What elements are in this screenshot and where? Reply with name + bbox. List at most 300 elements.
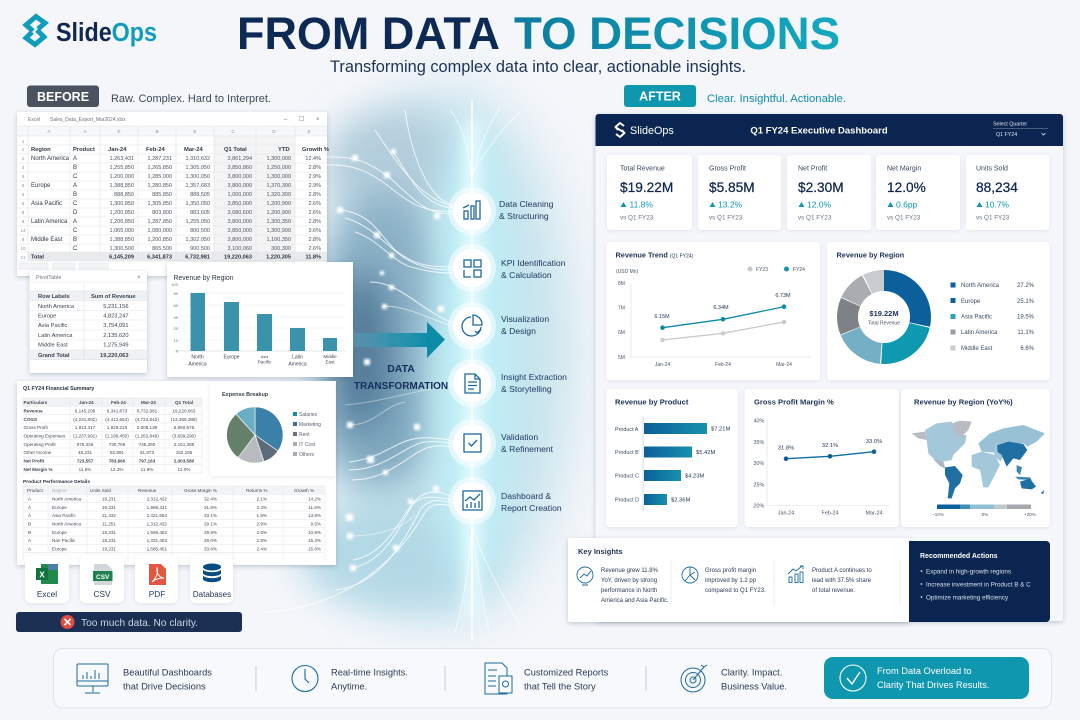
panel: financial summary and product tables: A	[28, 538, 32, 543]
panel: excel spreadsheet window: 11	[21, 255, 26, 260]
after label: AFTER	[639, 90, 681, 104]
panel: revenue by region bar window: 100	[171, 282, 179, 287]
panel: excel spreadsheet window: 19,220,063	[224, 254, 252, 260]
icon: databases: Databases	[193, 590, 231, 599]
panel: financial summary and product tables: Nan Pacific	[52, 538, 76, 543]
panel: revenue trend: Mar-24	[776, 362, 792, 368]
panel: excel spreadsheet window: 6,341,873	[147, 254, 172, 260]
panel: financial summary and product tables: Gross Profit	[24, 425, 48, 430]
panel: revenue by region bar window: 80	[174, 291, 179, 296]
panel: financial summary and product tables: 2,008,139	[137, 425, 158, 430]
panel: excel spreadsheet window: 2.6%	[308, 210, 321, 216]
panel: excel spreadsheet window: Product	[73, 147, 95, 153]
panel: financial summary and product tables: 15.3%	[308, 538, 321, 543]
panel: excel spreadsheet window: 6	[22, 174, 25, 179]
panel: excel spreadsheet window: D	[272, 129, 276, 134]
panel: financial summary and product tables: 15.8%	[308, 546, 321, 552]
panel: excel spreadsheet window: 1,300,000	[267, 156, 291, 162]
panel: revenue trend: 6.73M	[775, 293, 791, 299]
panel: financial summary and product tables: Returns %	[246, 488, 267, 493]
panel: expense breakup: IT Cost	[299, 442, 316, 448]
panel: financial summary and product tables: 12.3%	[110, 467, 124, 472]
panel: revenue trend: 6.34M	[713, 305, 729, 311]
arrow: data transformation	[353, 322, 445, 358]
panel: financial summary and product tables: 1,568,452	[147, 530, 167, 535]
kpi: gross profit: 13.2%	[718, 200, 743, 210]
panel: revenue trend: Feb-24	[715, 362, 731, 368]
panel: financial summary and product tables: A	[28, 496, 32, 502]
panel: financial summary and product tables: Net Profit	[24, 458, 45, 464]
panel: revenue trend: 7M	[618, 306, 625, 312]
panel: excel spreadsheet window: B	[155, 129, 159, 134]
panel: financial summary and product tables: 152,195	[176, 450, 193, 455]
panel: excel spreadsheet window: 1,287,231	[148, 156, 172, 162]
benefit: real-time: Anytime.	[331, 682, 367, 692]
panel: financial summary and product tables: Europe	[52, 530, 67, 535]
panel: excel spreadsheet window: 2.6%	[308, 246, 321, 252]
icon: excel: Excel	[37, 589, 57, 599]
insight: product a: of total revenue.	[812, 588, 855, 594]
before label	[27, 86, 271, 107]
icon: pdf: PDF	[149, 589, 165, 599]
panel: revenue by product: Product D	[615, 498, 639, 504]
panel: pivot table window: 4,823,247	[103, 314, 128, 320]
donut legend: 25.1%	[1017, 299, 1035, 305]
panel: financial summary and product tables: Particulars	[24, 400, 48, 405]
panel: gross profit margin: 35%	[754, 440, 764, 446]
panel: excel spreadsheet window: 2.8%	[308, 165, 321, 171]
panel: excel spreadsheet window: Europe	[31, 183, 51, 189]
panel: financial summary and product tables: (1,237,991)	[73, 434, 97, 438]
panel: pivot table window: Row Labels	[38, 294, 70, 300]
panel: excel spreadsheet window: 1,200,900	[267, 201, 291, 207]
panel: financial summary and product tables: 51,873	[140, 450, 154, 455]
panel: excel spreadsheet window: 6,145,209	[109, 254, 134, 260]
panel: financial summary and product tables: 16,231	[102, 505, 116, 510]
panel: financial summary and product tables: 1,929,219	[107, 425, 128, 430]
panel: excel spreadsheet window: 3,850,000	[228, 201, 252, 207]
panel: financial summary and product tables: 745,290	[139, 442, 156, 447]
panel: financial summary and product tables: (4,231,892)	[73, 417, 97, 422]
donut legend: 6.6%	[1020, 346, 1035, 352]
panel: excel spreadsheet window: 1,310,632	[186, 156, 210, 162]
panel: gross profit margin: 25%	[754, 483, 764, 489]
panel: revenue by region bar window: Latin	[292, 354, 303, 360]
logo wordmark: SlideOps	[56, 19, 157, 47]
donut legend: 19.5%	[1017, 314, 1035, 320]
callout: from data overload	[824, 657, 1029, 699]
insight: product a	[788, 566, 872, 594]
after label	[624, 85, 846, 107]
panel: revenue trend: 5M	[618, 355, 625, 361]
panel: financial summary and product tables: 675,326	[77, 442, 94, 447]
panel: financial summary and product tables: 18,231	[102, 496, 116, 502]
panel: financial summary and product tables: 2.9%	[257, 522, 267, 526]
panel: pivot table window: 2,135,620	[103, 333, 128, 339]
callout: from data overload: From Data Overload to	[877, 666, 972, 676]
panel: excel spreadsheet window: 300,300	[271, 246, 291, 252]
panel: excel spreadsheet window: North America	[31, 156, 70, 162]
panel: key insights	[568, 538, 910, 622]
panel: gross profit margin: 30%	[754, 461, 764, 467]
donut legend: North America	[961, 283, 1000, 289]
panel: excel spreadsheet window: E	[193, 129, 197, 134]
panel: recommended actions	[909, 541, 1050, 622]
panel: revenue by region map: Revenue by Region (YoY%)	[914, 398, 1013, 406]
panel: financial summary and product tables: (1,262,849)	[135, 434, 159, 438]
panel: excel spreadsheet window: 3,680,600	[228, 210, 252, 216]
icon: dashboard logo	[616, 123, 624, 137]
panel: financial summary and product tables: (1,198,450)	[105, 434, 129, 438]
panel: excel spreadsheet window: E	[117, 129, 121, 134]
panel: excel spreadsheet window: C	[231, 129, 235, 134]
panel: revenue by region bar window: America	[288, 362, 307, 368]
insight: profit margin: improved by 1.2 pp	[705, 578, 757, 584]
panel: excel spreadsheet window: ×	[316, 117, 320, 123]
panel: gross profit margin: 40%	[754, 419, 764, 425]
icon: error cross	[60, 615, 74, 629]
benefit: clarity: Business Value.	[721, 682, 787, 692]
before label: Raw. Complex. Hard to Interpret.	[111, 93, 271, 105]
step 1: data cleaning: & Structuring	[499, 211, 549, 221]
kpi: units sold: 10.7%	[985, 200, 1010, 210]
panel: excel spreadsheet window: 1,370,300	[267, 183, 291, 189]
panel: gross profit margin	[744, 389, 899, 527]
panel: excel spreadsheet window: 5	[22, 183, 25, 188]
panel: financial summary and product tables: 1,331,453	[147, 538, 167, 543]
panel: financial summary and product tables: 1,913,317	[75, 425, 96, 430]
panel: revenue by product: $2.36M	[671, 498, 691, 504]
donut legend: Asia Pacific	[961, 314, 992, 320]
icon: csv	[80, 555, 124, 603]
panel: excel spreadsheet window: 1,206,850	[110, 219, 134, 225]
panel: financial summary and product tables: A	[28, 505, 32, 510]
title: FROM DATA	[237, 8, 500, 59]
panel: pivot table window: Grand Total	[38, 353, 70, 359]
panel: financial summary and product tables: 1.8%	[257, 513, 267, 518]
chart legend: FY24	[793, 267, 805, 273]
panel: excel spreadsheet window: 803,800	[152, 210, 172, 216]
panel: excel spreadsheet window: 8	[22, 210, 25, 215]
panel: excel spreadsheet window: 1,300,050	[186, 174, 210, 180]
panel: revenue by region donut	[827, 242, 1050, 380]
panel: financial summary and product tables: 48,231	[78, 450, 92, 455]
panel: financial summary and product tables: Europe	[52, 505, 67, 510]
step 4: insight extraction	[453, 364, 567, 402]
panel: revenue by region bar window: Pacific	[258, 360, 272, 364]
panel: revenue by region donut: $19.22M	[869, 309, 899, 318]
icon: pdf	[135, 555, 178, 603]
panel: financial summary and product tables: 28.0%	[204, 538, 217, 543]
panel: revenue by product: $4.23M	[685, 474, 705, 480]
panel: revenue by region bar window: 0	[176, 348, 179, 354]
panel: financial summary and product tables: 1,988,431	[147, 505, 167, 510]
panel: gross profit margin: Feb-24	[821, 510, 839, 516]
panel: pivot table window: Middle East	[38, 342, 68, 348]
line chart: margin	[784, 449, 876, 461]
panel: excel spreadsheet window: 1,100,350	[267, 237, 291, 243]
bar chart: region bars	[190, 293, 337, 351]
label: data transformation	[354, 363, 448, 392]
subtitle: Transforming complex data into clear, actionable insights.	[330, 57, 746, 76]
panel: excel spreadsheet window: 885,850	[152, 192, 172, 198]
panel: financial summary and product tables: 6,145,209	[75, 408, 96, 414]
panel: revenue trend: (USD Mn)	[616, 269, 639, 275]
step 2: kpi identification: & Calculation	[501, 270, 552, 280]
insight: profit margin: Gross profit margin	[705, 568, 756, 574]
kpi: gross profit: Gross Profit	[709, 166, 746, 172]
panel: revenue by product	[606, 389, 738, 527]
panel: financial summary and product tables: 2,421,654	[147, 513, 167, 518]
kpi: net margin: 0.6pp	[896, 200, 918, 210]
panel: excel spreadsheet window: 883,605	[190, 210, 210, 216]
panel: revenue trend: 6M	[618, 330, 625, 336]
panel: financial summary and product tables: 33.1%	[204, 513, 217, 518]
kpi: net margin: 12.0%	[887, 180, 926, 195]
panel: revenue by product: $7.21M	[711, 426, 731, 432]
panel: excel spreadsheet window: 1,388,850	[110, 183, 134, 189]
panel: financial summary and product tables: Q1 Total	[175, 400, 193, 405]
step 5: validation: Validation	[501, 432, 538, 442]
dashboard header: SlideOps	[630, 125, 674, 137]
panel: excel spreadsheet window: 1,200,850	[148, 237, 172, 243]
icon: csv: CSV	[96, 574, 110, 581]
panel: excel spreadsheet window: 2.9%	[308, 174, 321, 180]
panel: excel spreadsheet window	[17, 112, 329, 276]
insight: profit margin: compared to Q1 FY23.	[705, 588, 766, 594]
panel: financial summary and product tables: 12.0%	[177, 467, 191, 472]
panel: revenue trend	[606, 242, 820, 380]
panel: financial summary and product tables: 783,660	[109, 458, 126, 464]
panel: expense breakup: Rent	[299, 432, 310, 438]
panel: excel spreadsheet window: 1,280,850	[148, 183, 172, 189]
panel: financial summary and product tables: 18,231	[102, 538, 116, 543]
panel: gross profit margin: 20%	[754, 504, 764, 510]
panel: financial summary and product tables: 29.8%	[204, 530, 217, 535]
panel: excel spreadsheet window: 1,302,050	[186, 237, 210, 243]
world map	[912, 421, 1045, 498]
donut legend	[950, 282, 1035, 352]
callout: from data overload: Clarity That Drives Results.	[877, 680, 989, 690]
panel: financial summary and product tables: 11.8%	[79, 467, 91, 472]
panel: revenue by region bar window: East	[325, 360, 335, 364]
map legend: +20%	[1024, 512, 1036, 517]
panel: financial summary and product tables: 9.5%	[311, 522, 321, 526]
panel: excel spreadsheet window: 14	[20, 228, 26, 233]
icon: databases	[190, 555, 233, 603]
donut legend: 27.2%	[1017, 283, 1035, 289]
panel: gross profit margin: 31.8%	[778, 446, 794, 452]
panel: financial summary and product tables: Revenue	[138, 488, 157, 493]
panel: financial summary and product tables: 723,557	[77, 458, 94, 464]
panel: pivot table window	[30, 271, 147, 373]
panel: excel spreadsheet window: 1,220,305	[266, 254, 291, 260]
panel: revenue trend: Revenue Trend (Q1 FY24)	[616, 250, 694, 260]
panel: excel spreadsheet window: 6,732,981	[185, 254, 210, 260]
icon: excel: X	[39, 570, 45, 580]
logo	[26, 16, 157, 47]
callout: too much data: Too much data. No clarity.	[81, 618, 198, 629]
panel: financial summary and product tables: 2,312,432	[147, 496, 167, 502]
panel: excel spreadsheet window: Growth %	[302, 147, 329, 153]
step 3: visualization: Visualization	[501, 314, 549, 324]
panel: expense breakup: Marketing	[299, 422, 321, 428]
panel: revenue by region donut: Total Revenue	[868, 320, 900, 326]
insight: revenue growth: Revenue grew 11.8%	[601, 568, 659, 574]
panel: excel spreadsheet window: 2.8%	[308, 219, 321, 225]
kpi: total revenue: $19.22M	[620, 180, 673, 195]
panel: financial summary and product tables: 2,303,580	[174, 458, 195, 464]
benefit: clarity	[681, 665, 787, 692]
panel: financial summary and product tables: (4,412,654)	[105, 417, 129, 422]
after label: Clear. Insightful. Actionable.	[707, 93, 846, 105]
panel: pivot table window: 3,754,091	[103, 323, 128, 329]
step 6: dashboard: Dashboard &	[501, 491, 551, 501]
panel: financial summary and product tables: B	[28, 530, 31, 535]
panel: excel spreadsheet window: Feb-24	[146, 147, 165, 153]
panel: excel spreadsheet window: Q1 Total	[224, 147, 247, 153]
panel: financial summary and product tables: 797,163	[139, 458, 156, 464]
line chart: fy24	[660, 304, 786, 330]
panel: financial summary and product tables: 19,231	[102, 546, 116, 552]
bar chart: products	[644, 423, 707, 505]
panel: pivot table window: North America	[38, 304, 75, 310]
kpi: units sold: Units Sold	[976, 166, 1008, 172]
panel: financial summary and product tables: Asia Pacific	[52, 513, 76, 518]
panel: excel spreadsheet window: 3,100,060	[228, 246, 252, 252]
panel: excel spreadsheet window: Asia Pacific	[31, 201, 62, 207]
panel: financial summary and product tables: 19,220,063	[172, 408, 196, 414]
panel: revenue by region map	[901, 389, 1050, 527]
dashboard header: Q1 FY24 Executive Dashboard	[750, 126, 888, 136]
panel: excel spreadsheet window: 888,850	[114, 192, 134, 198]
kpi: total revenue: vs Q1 FY23	[620, 214, 654, 222]
panel: excel spreadsheet window: 3,861,294	[228, 156, 252, 162]
panel: excel spreadsheet window: B	[73, 165, 77, 171]
panel: excel spreadsheet window: 3	[22, 165, 25, 170]
panel: revenue by region bar window: Asia	[261, 355, 269, 359]
panel: excel spreadsheet window: Jan-24	[108, 147, 127, 153]
panel: financial summary and product tables: 13.8%	[308, 513, 321, 518]
chart legend	[748, 266, 805, 273]
panel: pivot table window: ×	[137, 275, 141, 281]
panel: financial summary and product tables: B	[28, 522, 31, 526]
panel: excel spreadsheet window: 1,388,850	[110, 237, 134, 243]
panel: financial summary and product tables: 15,231	[102, 530, 116, 535]
kpi: gross profit	[698, 155, 781, 230]
panel: financial summary and product tables: Net Margin %	[24, 467, 53, 472]
panel: excel spreadsheet window: 865,500	[152, 246, 172, 252]
line chart: fy23	[660, 320, 786, 342]
panel: excel spreadsheet window: 1,357,683	[186, 183, 210, 189]
panel: financial summary and product tables: 1,685,451	[147, 546, 167, 552]
panel: revenue by region bar window: Europe	[223, 354, 240, 360]
panel: financial summary and product tables: 11.6%	[308, 505, 321, 510]
panel: excel spreadsheet window: 1,065,000	[110, 228, 134, 234]
panel: financial summary and product tables: Product Performance Details	[23, 479, 90, 485]
panel: recommended actions: Recommended Actions	[920, 553, 998, 560]
benefit: dashboards: Beautiful Dashboards	[123, 668, 212, 678]
panel: pivot table window: Sum of Revenue	[91, 294, 136, 300]
kpi: units sold: 88,234	[976, 180, 1018, 195]
panel: financial summary and product tables: 10.8%	[308, 530, 321, 535]
panel: revenue by region bar window: 60	[174, 303, 179, 308]
icon: check circle	[840, 665, 866, 691]
panel: financial summary and product tables: (3,699,290)	[172, 434, 196, 438]
panel: excel spreadsheet window: 1,350,050	[186, 201, 210, 207]
map legend: 0%	[982, 512, 988, 517]
panel: financial summary and product tables: Product	[27, 488, 44, 493]
kpi: net profit: Net Profit	[798, 166, 827, 172]
panel: excel spreadsheet window: 1,287,850	[148, 219, 172, 225]
panel: excel spreadsheet window: 6	[22, 201, 25, 206]
panel: revenue by product: Product A	[615, 427, 639, 433]
kpi: total revenue: Total Revenue	[620, 166, 665, 172]
panel: excel spreadsheet window: 900,500	[190, 246, 210, 252]
map legend: −10%	[932, 512, 944, 517]
dashboard header: Select Quarter	[993, 122, 1027, 128]
icon: excel	[25, 555, 69, 603]
panel: financial summary and product tables: 2.8%	[257, 538, 267, 543]
panel: excel spreadsheet window: 888,505	[190, 192, 210, 198]
panel: excel spreadsheet window: C	[73, 174, 78, 180]
panel: excel spreadsheet window: 1,255,050	[186, 219, 210, 225]
panel: excel spreadsheet window: 1	[22, 147, 25, 152]
panel: excel spreadsheet window: 1,300,000	[267, 174, 291, 180]
panel: financial summary and product tables: Other Income	[24, 450, 52, 455]
panel: excel spreadsheet window: 10	[20, 246, 26, 251]
panel: excel spreadsheet window: 1,200,900	[267, 210, 291, 216]
insight: revenue growth: performance in North	[601, 588, 657, 594]
kpi: units sold: vs Q1 FY23	[976, 214, 1010, 222]
panel: excel spreadsheet window: B	[73, 192, 77, 198]
panel: revenue by region donut: Revenue by Region	[836, 250, 904, 260]
panel: excel spreadsheet window: 1,080,000	[148, 228, 172, 234]
kpi: net profit: 12.0%	[807, 200, 832, 210]
kpi: net margin: Net Margin	[887, 166, 921, 172]
panel: revenue by product: Revenue by Product	[615, 398, 689, 406]
file type cards	[25, 555, 233, 603]
chart legend: FY23	[756, 267, 768, 273]
benefit: clarity: Clarity. Impact.	[721, 668, 782, 678]
panel: revenue by region bar window: 10	[174, 338, 179, 343]
panel: financial summary and product tables: Units Sold	[90, 488, 111, 493]
benefit: reports	[485, 663, 609, 694]
panel: excel spreadsheet window: 2.9%	[308, 183, 321, 189]
benefit: dashboards	[77, 664, 212, 693]
panel: excel spreadsheet window: 1,300,900	[267, 228, 291, 234]
benefit: real-time: Real-time Insights.	[331, 668, 408, 678]
step 6: dashboard: Report Creation	[501, 503, 562, 513]
panel: financial summary and product tables: North America	[52, 522, 82, 526]
kpi: net profit	[787, 155, 871, 230]
dashboard header	[596, 114, 1063, 146]
panel: excel spreadsheet window: A	[47, 129, 51, 134]
pie chart: expenses	[227, 407, 283, 463]
insight: revenue growth: YoY, driven by strong	[601, 578, 657, 584]
panel: pivot table window: 1,275,949	[103, 342, 128, 348]
step 5: validation	[453, 424, 554, 462]
panel: excel spreadsheet window: C	[73, 246, 78, 252]
panel: excel spreadsheet window: 8	[22, 219, 25, 224]
panel: financial summary and product tables: 52,891	[110, 450, 124, 455]
panel: financial summary and product tables: Region	[52, 488, 67, 493]
panel: excel spreadsheet window: Excel	[28, 117, 40, 123]
panel: financial summary and product tables: COGS	[24, 417, 37, 422]
panel: financial summary and product tables	[17, 381, 336, 565]
panel: excel spreadsheet window: 8	[22, 237, 25, 242]
panel: excel spreadsheet window: A	[73, 156, 77, 162]
